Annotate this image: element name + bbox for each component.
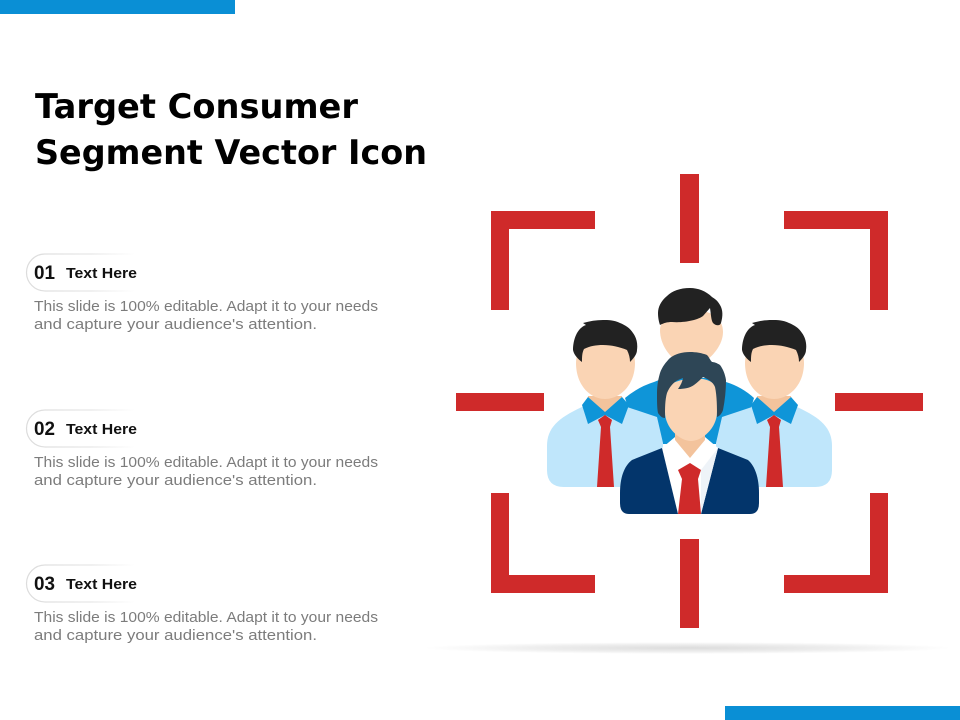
target reticle [456,174,923,628]
item 03: 03 [34,574,55,595]
bottom accent bar [725,706,960,720]
item 01: and capture your audience's attention. [34,317,317,333]
title: Segment Vector Icon [35,133,427,173]
item 02: This slide is 100% editable. Adapt it to your needs [34,455,378,471]
back person [625,288,754,444]
ground shadow [424,642,952,654]
left person [547,320,663,487]
right person [716,320,832,487]
title: Target Consumer [35,87,358,127]
top accent bar [0,0,235,14]
item 01: This slide is 100% editable. Adapt it to your needs [34,299,378,315]
item 01: Text Here [66,266,137,282]
item 02: and capture your audience's attention. [34,473,317,489]
item 02: Text Here [66,422,137,438]
item 03 [26,565,378,644]
item 03: Text Here [66,577,137,593]
icon: consumer group [547,288,832,514]
item 01 [26,254,378,333]
front person [620,352,759,514]
item 02: 02 [34,419,55,440]
item 02 [26,410,378,489]
item 03: This slide is 100% editable. Adapt it to your needs [34,610,378,626]
item 01: 01 [34,263,55,284]
item 03: and capture your audience's attention. [34,628,317,644]
title [35,87,427,173]
